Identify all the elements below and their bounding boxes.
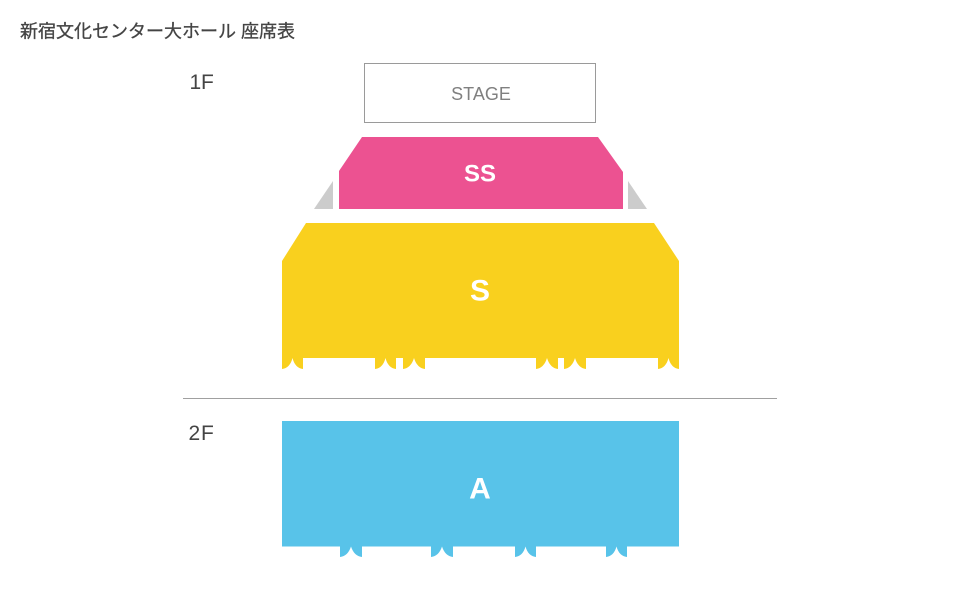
stage bbox=[364, 64, 596, 122]
side block: left grey triangle bbox=[314, 181, 333, 209]
seat block: SS bbox=[339, 137, 623, 209]
seat block: SS: SS bbox=[464, 160, 496, 188]
seat block: A bbox=[282, 421, 679, 557]
title: 新宿文化センター大ホール 座席表 bbox=[20, 22, 295, 42]
floor divider bbox=[183, 398, 777, 399]
seat block: A: A bbox=[469, 472, 491, 506]
floor label: 2F: F bbox=[201, 422, 214, 445]
side block: right grey triangle bbox=[628, 181, 647, 209]
floor label: 1F: F bbox=[201, 71, 214, 94]
seat block: S: S bbox=[470, 274, 490, 308]
stage: STAGE bbox=[451, 84, 511, 104]
seat block: S bbox=[282, 223, 679, 369]
floor label: 1F: 1 bbox=[190, 71, 201, 94]
floor label: 2F: 2 bbox=[188, 422, 200, 445]
